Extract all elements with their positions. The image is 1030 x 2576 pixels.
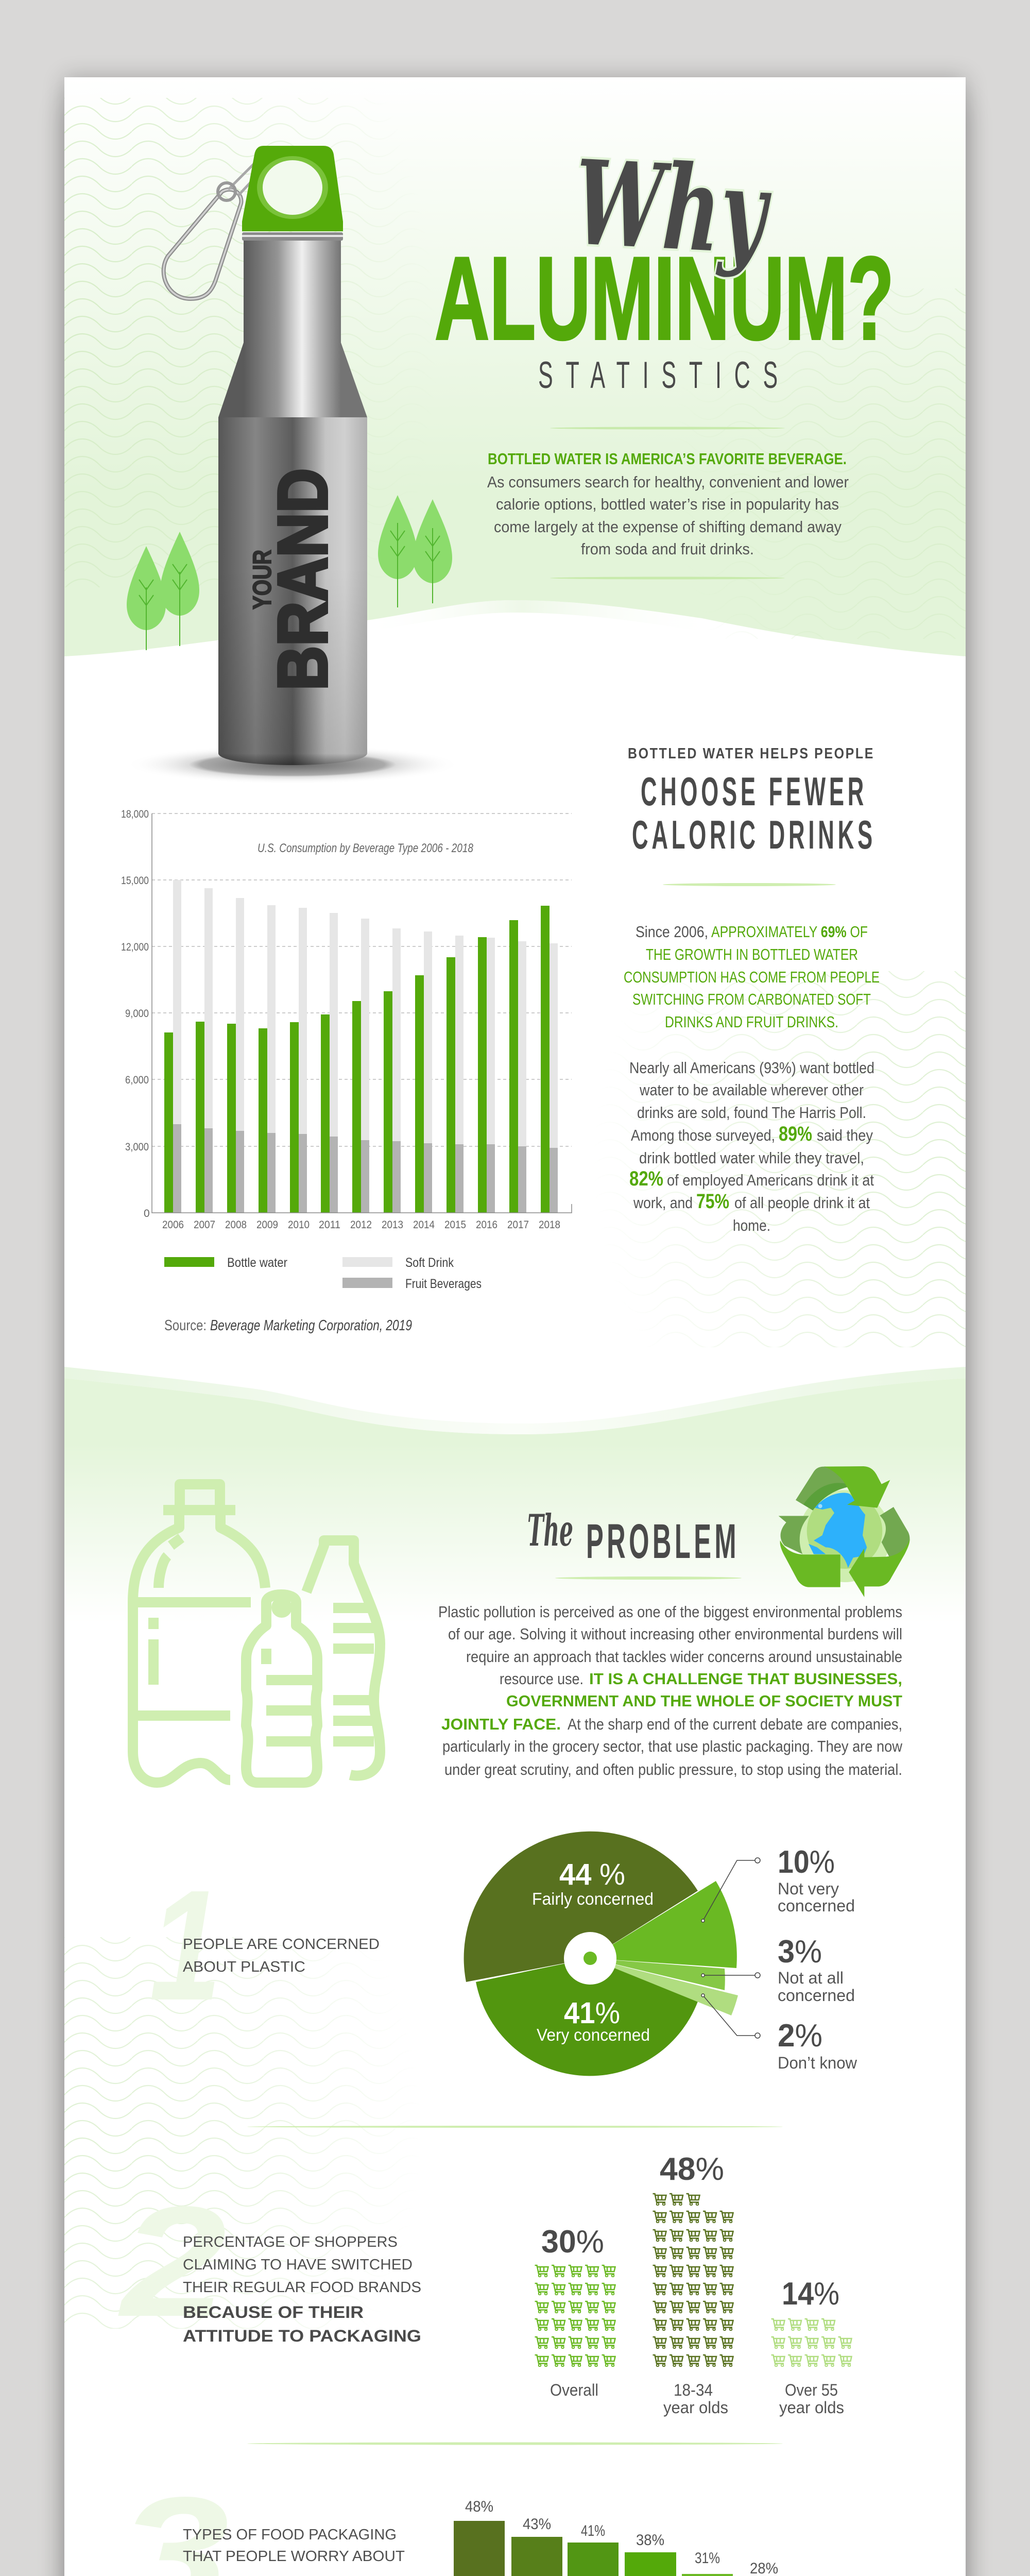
- chart axes: [152, 814, 572, 1213]
- pictogram: 18-34 year olds: 18-34: [674, 2381, 713, 2399]
- y axis labels: 9,000: [125, 1008, 149, 1020]
- problem paragraph: particularly in the grocery sector, that use plastic packaging. They are now: [442, 1737, 903, 1755]
- intro text: As consumers search for healthy, convenient and lower: [487, 473, 849, 491]
- pictogram: over 55 year olds: Over 55: [785, 2381, 838, 2399]
- survey paragraph: 89%: [779, 1123, 812, 1145]
- chart legend: Soft Drink: [405, 1256, 454, 1270]
- label: 3 percent: concerned: [778, 1986, 855, 2005]
- x axis labels: 2015: [444, 1219, 466, 1231]
- label: 10 percent: 10%: [778, 1844, 835, 1880]
- statistic 1 label: [183, 1936, 380, 1975]
- statistic 2 label: PERCENTAGE OF SHOPPERS: [183, 2234, 398, 2250]
- bar value labels: 48%: [465, 2498, 493, 2515]
- y axis labels: 15,000: [121, 875, 149, 887]
- label: 2 percent: 2%: [778, 2018, 822, 2054]
- divider: [555, 1577, 742, 1580]
- problem paragraph: [438, 1603, 903, 1778]
- y axis labels: 0: [144, 1208, 150, 1219]
- bottle brand text: BRAND: [264, 468, 341, 690]
- statistic 2 label: ATTITUDE TO PACKAGING: [183, 2327, 421, 2345]
- source note: Source:: [164, 1317, 207, 1334]
- label: 10 percent: [778, 1844, 855, 1915]
- pie chart: concern about plastic: [464, 1832, 857, 2076]
- slice: not at all concerned: [590, 1958, 725, 1990]
- x axis labels: [162, 1219, 560, 1231]
- bar chart: consumption by beverage type: [121, 808, 572, 1231]
- chart grid: [152, 814, 572, 1146]
- wave pattern: header right: [746, 289, 966, 639]
- x axis labels: 2007: [194, 1219, 215, 1231]
- chart title: U.S. Consumption by Beverage Type 2006 - 2018: [258, 841, 474, 855]
- title: [435, 134, 894, 396]
- hill highlight: [456, 600, 604, 617]
- source note: [164, 1317, 412, 1334]
- chart legend: Fruit Beverages: [405, 1277, 482, 1291]
- pie label: 44 percent: [532, 1858, 654, 1908]
- x axis labels: 2011: [319, 1219, 340, 1231]
- icon: large bottle: [133, 1484, 265, 1783]
- divider: [247, 2126, 783, 2128]
- statistic 3 label: THAT PEOPLE WORRY ABOUT: [183, 2548, 405, 2565]
- divider: [247, 2442, 783, 2445]
- survey paragraph: of all people drink it at: [734, 1194, 870, 1212]
- label: 2 percent: Don’t know: [778, 2054, 857, 2072]
- heading: choose fewer caloric drinks: [628, 745, 876, 857]
- pictogram: 18-34 year olds: 48%: [660, 2151, 724, 2187]
- y axis labels: 18,000: [121, 808, 149, 820]
- green paragraph: SWITCHING FROM CARBONATED SOFT: [632, 990, 871, 1008]
- bottle shoulder: [218, 343, 367, 417]
- heading: the problem: PROBLEM: [586, 1514, 740, 1569]
- bar value labels: [465, 2498, 888, 2576]
- statistic 2 label: [183, 2234, 421, 2345]
- pictogram: overall: [535, 2224, 615, 2399]
- bar value labels: 41%: [581, 2522, 605, 2539]
- divider: [663, 883, 836, 886]
- problem paragraph: JOINTLY FACE.: [441, 1715, 561, 1733]
- pictogram: 18-34 year olds: year olds: [663, 2398, 728, 2417]
- source note: Beverage Marketing Corporation, 2019: [210, 1317, 412, 1334]
- x axis labels: 2018: [539, 1219, 560, 1231]
- statistic 2 label: BECAUSE OF THEIR: [183, 2303, 364, 2321]
- carabiner clip: [164, 154, 269, 299]
- survey paragraph: home.: [733, 1216, 770, 1234]
- problem section background: [64, 1378, 966, 1584]
- heading: the problem: The: [527, 1505, 573, 1556]
- problem paragraph: require an approach that tackles wider concerns around unsustainable: [466, 1648, 902, 1666]
- pictogram: 18-34 year olds: [653, 2151, 733, 2417]
- chart legend: [164, 1256, 482, 1291]
- pictogram: overall: Overall: [550, 2381, 598, 2399]
- bottle mockup: [125, 146, 460, 784]
- bottle collar ring: [242, 232, 343, 241]
- slice: don't know: [590, 1958, 738, 2015]
- chart legend: Bottle water: [227, 1256, 287, 1270]
- bar chart: packaging worries: [454, 2498, 904, 2576]
- pie centre: [564, 1932, 616, 1985]
- big numeral 1: 1: [149, 1857, 221, 2033]
- heading: the problem: [527, 1505, 740, 1569]
- bottle floor shadow: [125, 745, 460, 784]
- problem paragraph: GOVERNMENT AND THE WHOLE OF SOCIETY MUST: [506, 1692, 902, 1710]
- y axis labels: 6,000: [125, 1074, 149, 1086]
- divider: [550, 577, 785, 579]
- survey paragraph: of employed Americans drink it at: [667, 1171, 874, 1189]
- survey paragraph: drinks are sold, found The Harris Poll.: [637, 1104, 866, 1122]
- label: 3 percent: 3%: [778, 1934, 822, 1970]
- survey paragraph: 82%: [629, 1167, 663, 1190]
- leader lines: [701, 1858, 760, 2038]
- x axis labels: 2017: [507, 1219, 529, 1231]
- slice: fairly concerned: [464, 1832, 698, 1982]
- statistic 3 label: TYPES OF FOOD PACKAGING: [183, 2527, 397, 2543]
- survey paragraph: water to be available wherever other: [639, 1081, 864, 1099]
- statistic 2 label: THEIR REGULAR FOOD BRANDS: [183, 2279, 421, 2296]
- green paragraph: [624, 923, 880, 1031]
- bottle green cap: [242, 146, 343, 231]
- icon: small bottle: [246, 1595, 317, 1783]
- statistic 1 label: PEOPLE ARE CONCERNED: [183, 1936, 380, 1953]
- wave pattern: beverage section: [631, 971, 966, 1347]
- wave pattern: statistics left: [64, 1937, 384, 2329]
- label: 3 percent: Not at all: [778, 1969, 844, 1987]
- header background: [64, 165, 966, 656]
- pictogram: over 55 year olds: 14%: [782, 2276, 839, 2312]
- label: 2 percent: [778, 2018, 857, 2072]
- green paragraph: Since 2006,: [636, 923, 708, 941]
- slice: very concerned: [476, 1958, 698, 2076]
- intro text: from soda and fruit drinks.: [581, 540, 754, 558]
- icon: right trees: [378, 495, 452, 607]
- bottled water bars: [164, 906, 550, 1213]
- survey paragraph: Nearly all Americans (93%) want bottled: [629, 1059, 874, 1077]
- pictogram: overall: 30%: [541, 2224, 604, 2260]
- problem paragraph: Plastic pollution is perceived as one of the biggest environmental problems: [438, 1603, 902, 1621]
- bottle neck: [244, 240, 341, 343]
- label: 10 percent: Not very: [778, 1879, 839, 1898]
- bar value labels: 38%: [636, 2532, 664, 2549]
- fruit beverage bars: [173, 1124, 558, 1213]
- soft drink bars: [173, 880, 558, 1213]
- bars: [454, 2521, 904, 2576]
- intro text: come largely at the expense of shifting demand away: [494, 518, 842, 536]
- intro text: BOTTLED WATER IS AMERICA’S FAVORITE BEVERAGE.: [488, 450, 847, 468]
- bar value labels: 43%: [523, 2516, 551, 2533]
- statistic 2 label: CLAIMING TO HAVE SWITCHED: [183, 2257, 413, 2273]
- icon: left trees: [127, 532, 199, 650]
- icon: recycling globe: [779, 1466, 910, 1597]
- green paragraph: DRINKS AND FRUIT DRINKS.: [665, 1013, 838, 1031]
- survey paragraph: drink bottled water while they travel,: [639, 1149, 864, 1167]
- x axis labels: 2010: [288, 1219, 310, 1231]
- intro text: [487, 450, 849, 558]
- problem paragraph: At the sharp end of the current debate are companies,: [568, 1715, 902, 1733]
- x axis labels: 2006: [162, 1219, 184, 1231]
- wave pattern: header left: [64, 98, 391, 587]
- icon: plastic bottles: [133, 1484, 380, 1783]
- x axis labels: 2009: [256, 1219, 278, 1231]
- pie label: 44 percent: 44 %: [559, 1858, 625, 1891]
- problem paragraph: IT IS A CHALLENGE THAT BUSINESSES,: [589, 1670, 902, 1688]
- x axis labels: 2008: [225, 1219, 247, 1231]
- statistic 3 label: [183, 2527, 405, 2565]
- problem section wave band: [64, 1367, 966, 1434]
- survey paragraph: [629, 1059, 874, 1234]
- big numeral 2: 2: [118, 2174, 227, 2349]
- problem paragraph: of our age. Solving it without increasing other environmental burdens will: [448, 1625, 902, 1643]
- x axis labels: 2016: [476, 1219, 497, 1231]
- green paragraph: THE GROWTH IN BOTTLED WATER: [646, 945, 858, 963]
- y axis labels: 12,000: [121, 941, 149, 953]
- problem paragraph: resource use.: [500, 1670, 583, 1688]
- slice: not very concerned: [590, 1881, 737, 1968]
- x axis labels: 2013: [382, 1219, 403, 1231]
- divider: [550, 427, 785, 430]
- label: 10 percent: concerned: [778, 1896, 855, 1915]
- pie label: 41 percent: Very concerned: [537, 2025, 650, 2044]
- survey paragraph: said they: [817, 1126, 873, 1144]
- x axis labels: 2014: [413, 1219, 435, 1231]
- x axis labels: 2012: [350, 1219, 372, 1231]
- statistic 1 label: ABOUT PLASTIC: [183, 1959, 305, 1975]
- bottle bottom shade: [218, 567, 367, 765]
- heading: choose fewer caloric drinks: BOTTLED WATER HELPS PEOPLE: [628, 745, 874, 762]
- survey paragraph: 75%: [696, 1190, 729, 1213]
- label: 3 percent: [778, 1934, 855, 2005]
- survey paragraph: Among those surveyed,: [631, 1126, 775, 1144]
- green paragraph: CONSUMPTION HAS COME FROM PEOPLE: [624, 968, 880, 986]
- pie label: 44 percent: Fairly concerned: [532, 1889, 654, 1908]
- pie label: 41 percent: [537, 1996, 650, 2044]
- title: statistics: STATISTICS: [538, 354, 791, 396]
- bottle brand text: YOUR: [248, 550, 277, 609]
- survey paragraph: work, and: [633, 1194, 693, 1212]
- bottle body: [218, 417, 367, 765]
- bar value labels: 31%: [695, 2550, 720, 2567]
- y axis labels: [121, 808, 150, 1219]
- problem paragraph: under great scrutiny, and often public pressure, to stop using the material.: [444, 1760, 902, 1778]
- pictogram: over 55 year olds: [771, 2276, 852, 2417]
- title: why: Why: [571, 134, 775, 281]
- y axis labels: 3,000: [125, 1141, 149, 1153]
- intro text: calorie options, bottled water’s rise in popularity has: [496, 495, 839, 513]
- green paragraph: APPROXIMATELY 69% OF: [711, 923, 868, 941]
- bottle cap ring: [257, 156, 328, 219]
- icon: medium bottle: [306, 1540, 380, 1776]
- pictogram: over 55 year olds: year olds: [779, 2398, 844, 2417]
- pie label: 41 percent: 41%: [564, 1996, 620, 2030]
